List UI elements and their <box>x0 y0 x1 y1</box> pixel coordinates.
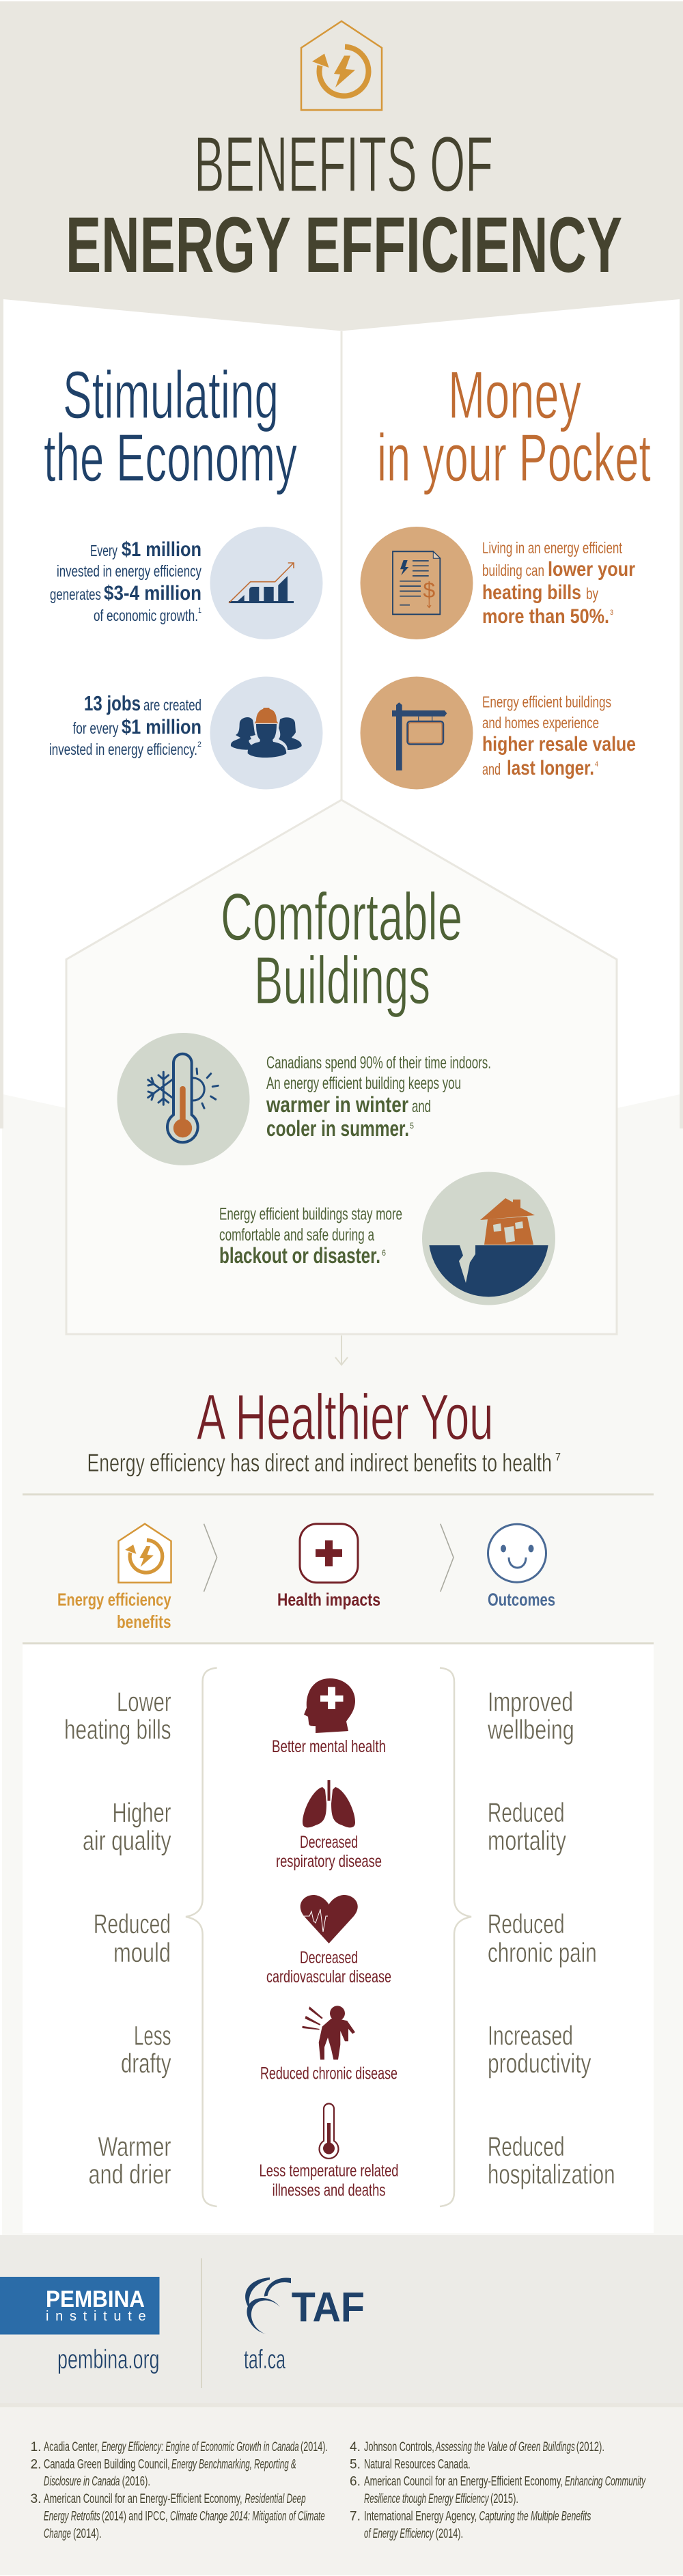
text: economic growth: 1 <box>198 607 201 615</box>
references: right column: 5. <box>350 2458 361 2471</box>
references: left column <box>31 2440 328 2541</box>
column: energy efficiency benefits list: heating bills <box>64 1715 171 1745</box>
references: left column: Energy Efficiency: Engine of Economic Growth in Canada <box>102 2440 299 2454</box>
text: warmer and cooler: 5 <box>410 1121 414 1131</box>
references: left column: Energy Retrofits <box>44 2510 100 2524</box>
item: decreased respiratory disease <box>276 1780 382 1871</box>
icon: lungs <box>303 1780 355 1827</box>
label: health impacts: Health impacts <box>277 1590 380 1610</box>
icon: thermometer <box>320 2104 339 2159</box>
icon: workers <box>210 676 322 790</box>
heading: stimulating the economy <box>44 357 297 495</box>
text: jobs created <box>49 691 201 758</box>
header band <box>0 1 683 331</box>
link: taf.ca: taf.ca <box>244 2345 285 2374</box>
column: outcomes list: Reduced <box>488 1909 564 1939</box>
text: lower heating bills: 3 <box>610 609 613 617</box>
label: outcomes: Outcomes <box>488 1590 555 1610</box>
text: economic growth: of economic growth. <box>94 607 198 624</box>
white panel for health table <box>23 1644 654 2233</box>
subheading: 7 <box>555 1452 561 1463</box>
references: left column: Disclosure in Canada <box>44 2475 120 2489</box>
house outline <box>66 800 617 1334</box>
heading: comfortable buildings: Buildings <box>254 943 430 1018</box>
column: outcomes list: chronic pain <box>488 1938 597 1968</box>
icon: energy bill: $ <box>423 578 435 603</box>
item: better mental health <box>272 1678 386 1756</box>
logo: TAF: TAF <box>292 2284 365 2330</box>
label: Decreased <box>300 1833 358 1852</box>
item: less temperature related illnesses <box>260 2104 399 2200</box>
references: left column: Energy Benchmarking, Reporting & <box>171 2458 296 2471</box>
references: right column: (2012). <box>576 2440 604 2454</box>
references: left column: Climate Change 2014: Mitigation of Climate <box>170 2510 325 2524</box>
references: right column: (2014). <box>436 2527 463 2541</box>
logo: pembina institute <box>0 2277 160 2335</box>
heading: stimulating the economy: Stimulating <box>63 357 279 432</box>
references: right column: 4. <box>350 2440 361 2454</box>
text: economic growth <box>50 538 201 624</box>
label: energy efficiency benefits: benefits <box>117 1611 171 1632</box>
text: warmer and cooler: Canadians spend 90% of their time indoors. <box>266 1053 491 1072</box>
heading: a healthier you: A Healthier You <box>197 1381 493 1454</box>
text: jobs created: are created <box>143 696 201 714</box>
references: right column: of Energy Efficiency <box>364 2527 434 2541</box>
references: right column <box>350 2440 646 2541</box>
references: left column: American Council for an Energy-Efficient Economy, <box>44 2492 242 2506</box>
label: Decreased <box>300 1948 358 1967</box>
text: resale value <box>482 693 636 779</box>
text: resale value: last longer. <box>507 757 594 779</box>
label: energy efficiency benefits: Energy efficiency <box>57 1590 171 1610</box>
item: decreased cardiovascular disease <box>266 1895 391 1986</box>
references: right column: Johnson Controls, <box>364 2440 434 2454</box>
icon: energy efficiency benefits <box>119 1524 171 1583</box>
text: resale value: and homes experience <box>482 714 599 732</box>
icon: energy bill <box>361 527 473 639</box>
heading: money in your pocket <box>377 357 651 495</box>
references: left column: (2014) and IPCC, <box>102 2510 168 2524</box>
column: energy efficiency benefits list: air quality <box>83 1826 171 1856</box>
text: lower heating bills: by <box>586 585 598 603</box>
column: energy efficiency benefits list: Warmer <box>98 2132 171 2162</box>
text: resale value: higher resale value <box>482 733 636 756</box>
text: resale value: Energy efficient buildings <box>482 693 611 710</box>
label: Less temperature related <box>260 2161 399 2180</box>
text: blackout or disaster: Energy efficient buildings stay more <box>219 1205 402 1224</box>
label <box>266 1948 391 1986</box>
icon: growth chart <box>210 527 322 639</box>
lower section background <box>0 1094 683 2235</box>
text: lower heating bills: building can <box>482 562 544 579</box>
icon: person in pain <box>302 2006 355 2060</box>
text: blackout or disaster <box>219 1205 402 1268</box>
logo: pembina institute: institute <box>46 2309 146 2324</box>
text: lower heating bills: more than 50%. <box>482 605 609 628</box>
heading: comfortable buildings <box>221 879 462 1018</box>
references: left column: 3. <box>31 2492 41 2506</box>
icon: smiley <box>488 1524 546 1582</box>
footer band <box>0 2235 683 2575</box>
column: energy efficiency benefits list: drafty <box>121 2049 171 2079</box>
column: energy efficiency benefits list <box>64 1687 171 2190</box>
references: right column: (2015). <box>490 2492 518 2506</box>
text: lower heating bills: lower your <box>548 558 635 581</box>
arrow: chevron one <box>204 1524 217 1592</box>
text: warmer and cooler: and <box>412 1097 431 1116</box>
references: right column: International Energy Agency, <box>364 2510 477 2524</box>
column: outcomes list: mortality <box>488 1826 566 1856</box>
text: blackout or disaster: blackout or disaster. <box>219 1243 380 1268</box>
text: blackout or disaster: 6 <box>382 1248 386 1258</box>
references: left column: Change <box>44 2527 71 2541</box>
column: outcomes list: Increased <box>488 2021 573 2051</box>
text: blackout or disaster: comfortable and safe during a <box>219 1225 374 1245</box>
panel: stimulating the economy <box>44 357 322 790</box>
column: outcomes list: wellbeing <box>487 1715 574 1745</box>
text: lower heating bills <box>482 539 635 628</box>
references: left column: Acadia Center, <box>44 2440 99 2454</box>
label: energy efficiency benefits <box>57 1590 171 1632</box>
references: right column: 7. <box>350 2510 361 2524</box>
text: jobs created: for every <box>72 719 119 737</box>
side strips of the upper panel <box>0 299 683 1128</box>
label: illnesses and deaths <box>273 2180 385 2200</box>
text: economic growth: $1 million <box>122 538 201 561</box>
references: right column: Natural Resources Canada. <box>364 2458 471 2471</box>
label: Reduced chronic disease <box>260 2064 398 2083</box>
arrow: chevron two <box>441 1524 454 1592</box>
references: right column: American Council for an Energy-Efficient Economy, <box>364 2475 563 2489</box>
column: energy efficiency benefits list: Lower <box>117 1687 171 1717</box>
text: warmer and cooler: An energy efficient building keeps you <box>266 1074 461 1093</box>
column: outcomes list: Reduced <box>488 2132 564 2162</box>
text: economic growth: generates <box>50 585 101 603</box>
references: right column: Assessing the Value of Green Buildings <box>435 2440 575 2454</box>
icon: energy house <box>301 21 382 110</box>
text: jobs created: 13 jobs <box>84 691 141 715</box>
arrow: down connector <box>335 1335 348 1365</box>
centre divider <box>340 331 343 803</box>
column: outcomes list: hospitalization <box>488 2160 615 2190</box>
icon: for sale sign <box>361 676 473 790</box>
column: outcomes list: Reduced <box>488 1798 564 1828</box>
label: Better mental health <box>272 1737 386 1756</box>
item: reduced chronic disease <box>260 2006 398 2083</box>
text: resale value: and <box>482 760 501 778</box>
references: left column: Residential Deep <box>245 2492 306 2506</box>
references: right column: Resilience though Energy Efficiency <box>364 2492 490 2506</box>
logo: TAF <box>245 2277 365 2334</box>
heading: stimulating the economy: the Economy <box>44 420 297 495</box>
text: warmer and cooler <box>266 1053 491 1141</box>
references: right column: Capturing the Multiple Benefits <box>479 2510 591 2524</box>
title <box>66 121 622 289</box>
references: left column: (2014). <box>301 2440 328 2454</box>
icon: heart <box>301 1895 358 1943</box>
text: jobs created: 2 <box>197 740 201 749</box>
column: energy efficiency benefits list: mould <box>113 1938 171 1968</box>
column: outcomes list: Improved <box>488 1687 573 1717</box>
label: cardiovascular disease <box>266 1967 391 1986</box>
references: right column: 6. <box>350 2475 361 2489</box>
bracket: right <box>440 1668 471 2206</box>
icon: head <box>304 1678 355 1733</box>
text: jobs created: invested in energy efficiency. <box>49 740 197 758</box>
text: lower heating bills: Living in an energy efficient <box>482 539 622 557</box>
heading: comfortable buildings: Comfortable <box>221 879 462 954</box>
heading: money in your pocket: Money <box>448 357 581 432</box>
text: warmer and cooler: warmer in winter <box>266 1092 408 1117</box>
column: outcomes list: productivity <box>488 2049 591 2079</box>
label: respiratory disease <box>276 1852 382 1871</box>
column: energy efficiency benefits list: Less <box>134 2021 171 2051</box>
link: pembina.org: pembina.org <box>57 2345 160 2374</box>
references: left column: 1. <box>31 2440 41 2454</box>
text: warmer and cooler: cooler in summer. <box>266 1116 409 1141</box>
column: outcomes list <box>487 1687 615 2190</box>
panel: comfortable buildings <box>66 800 617 1334</box>
panel: money in your pocket <box>361 357 651 790</box>
references: left column: 2. <box>31 2458 41 2471</box>
text: economic growth: Every <box>90 542 117 559</box>
icon: house on cracked ground <box>422 1172 555 1305</box>
references: left column: (2016). <box>122 2475 150 2489</box>
label <box>260 2161 399 2200</box>
text: resale value: 4 <box>595 760 598 768</box>
column: energy efficiency benefits list: and drier <box>89 2160 171 2190</box>
text: economic growth: $3-4 million <box>104 582 201 605</box>
column: energy efficiency benefits list: Higher <box>112 1798 171 1828</box>
references: left column: (2014). <box>73 2527 102 2541</box>
references: left column: Canada Green Building Council, <box>44 2458 170 2471</box>
text: lower heating bills: heating bills <box>482 581 581 604</box>
logo: pembina institute: PEMBINA <box>46 2286 145 2312</box>
text: economic growth: invested in energy efficiency <box>57 562 201 580</box>
icon: thermometer with snowflake and sun <box>117 1033 250 1165</box>
bracket: left <box>186 1668 217 2206</box>
icon: health cross <box>300 1524 358 1583</box>
label <box>276 1833 382 1871</box>
text: jobs created: $1 million <box>122 716 201 738</box>
column: energy efficiency benefits list: Reduced <box>94 1909 171 1939</box>
